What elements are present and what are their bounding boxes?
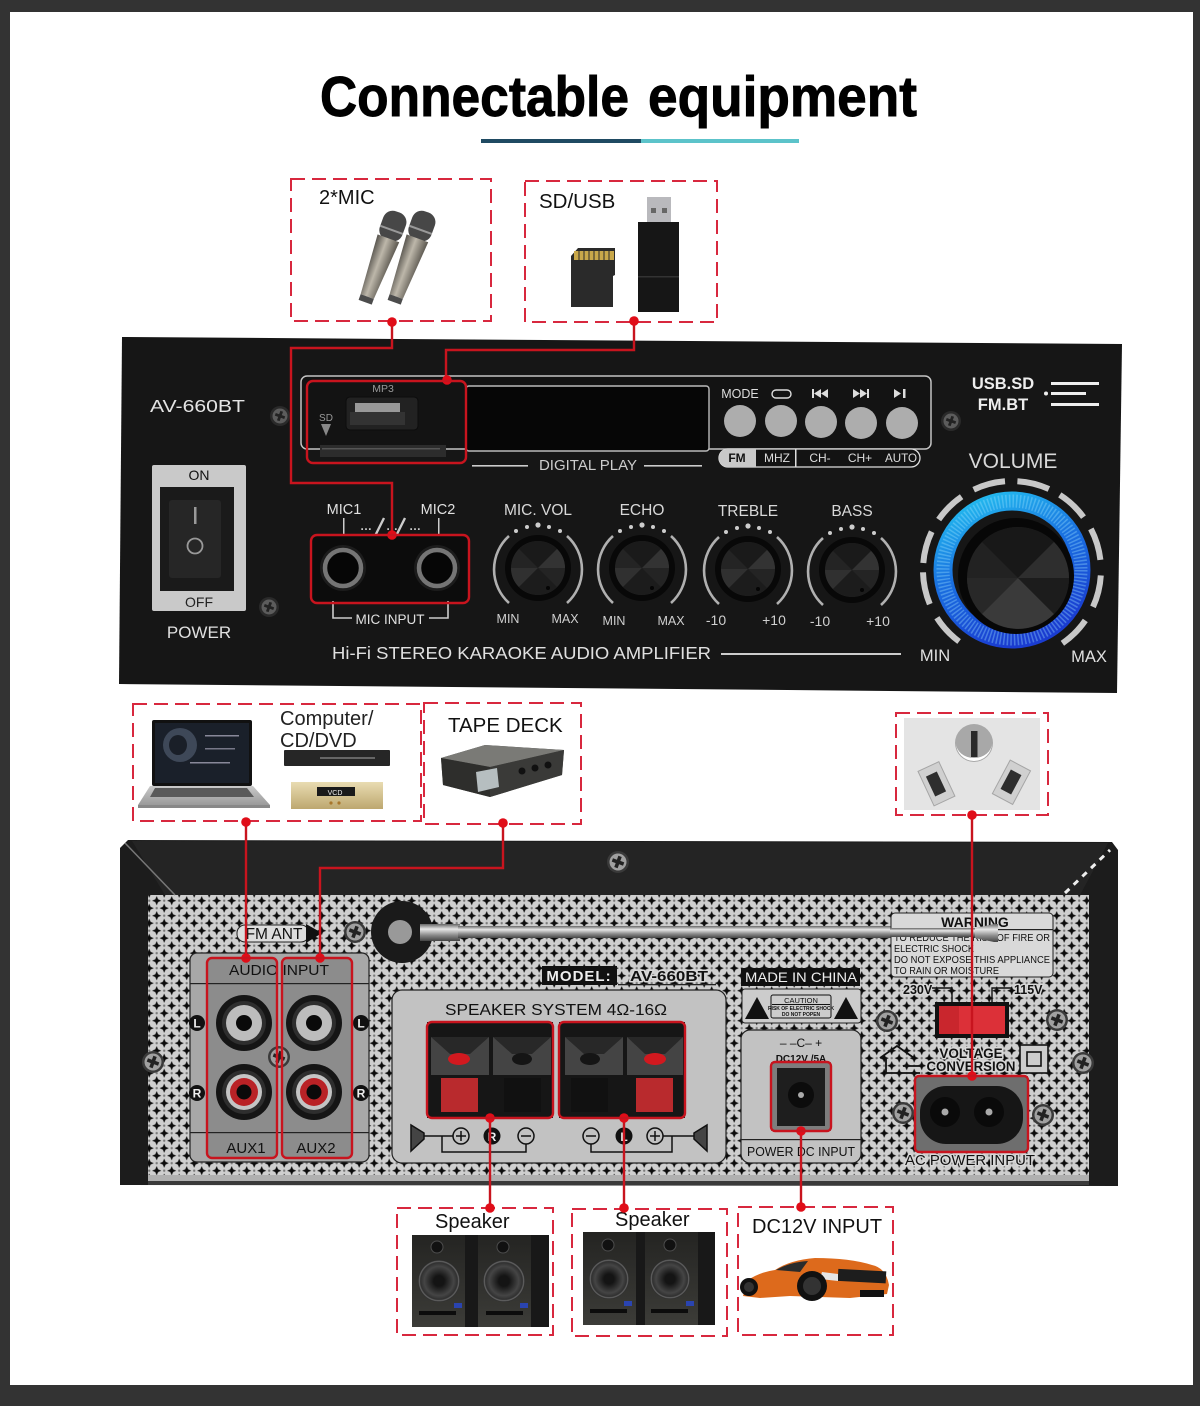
screws: front xyxy=(259,406,961,617)
knob: BASS xyxy=(808,503,896,629)
front panel of amplifier xyxy=(119,337,1122,693)
power switch: ON xyxy=(188,467,210,483)
voltage conversion label and icons: CONVERSION xyxy=(926,1059,1016,1074)
model plate: AV-660BT xyxy=(630,968,708,985)
USB and SD slots: SD xyxy=(319,413,333,424)
label: 2*MIC: 2*MIC xyxy=(319,187,375,209)
icon: speaker pair xyxy=(412,1235,549,1327)
terminal: L+ xyxy=(627,1037,683,1112)
made in china plate: MADE IN CHINA xyxy=(745,969,858,985)
caution plate xyxy=(742,989,861,1023)
LED display xyxy=(466,386,709,451)
connector: DC input line xyxy=(771,1062,831,1212)
label: Speaker: Speaker xyxy=(615,1209,690,1231)
icon: microphones xyxy=(354,208,438,306)
model label: AV-660BT xyxy=(150,396,245,416)
label: POWER: POWER xyxy=(167,623,231,642)
icon: orange sports car xyxy=(740,1258,889,1301)
warning plate: TO RAIN OR MOISTURE xyxy=(894,966,999,977)
icon: VCD player: VCD xyxy=(328,790,342,797)
display module frame xyxy=(301,376,931,449)
audio input block xyxy=(189,953,369,1162)
mode selector bar: CH+ xyxy=(848,451,872,465)
voltage conversion label and icons: VOLTAGE xyxy=(939,1046,1003,1061)
mic inputs: MIC2 xyxy=(421,502,455,518)
power switch: OFF xyxy=(185,594,213,610)
volume knob: MAX xyxy=(1071,648,1107,666)
voltage switch: 230V xyxy=(903,983,933,997)
USB.SD FM.BT badge: FM.BT xyxy=(978,396,1028,414)
label: TAPE DECK: TAPE DECK xyxy=(448,714,563,737)
knob: TREBLE: +10 xyxy=(762,612,786,628)
speaker system block: R xyxy=(488,1130,497,1144)
power switch xyxy=(152,465,246,611)
panel: Speaker (left channel) xyxy=(572,1209,727,1336)
mic inputs: … xyxy=(409,519,421,533)
panel: wall socket xyxy=(896,713,1048,815)
connector: computer line xyxy=(207,817,277,1158)
icon: speaker pair xyxy=(583,1232,715,1325)
AC power input xyxy=(905,1076,1035,1169)
label: Speaker: Speaker xyxy=(435,1211,510,1233)
mic inputs: … xyxy=(386,519,398,533)
AC power input: AC POWER INPUT xyxy=(905,1152,1035,1169)
terminal: L- xyxy=(565,1037,623,1112)
speaker system block: SPEAKER SYSTEM 4Ω-16Ω xyxy=(445,1002,667,1019)
title: Connectable xyxy=(320,65,629,129)
power DC input block: DC12V /5A xyxy=(776,1054,826,1065)
mic inputs: MIC1 xyxy=(327,502,361,518)
icon: socket xyxy=(904,718,1040,810)
knob: TREBLE xyxy=(704,503,792,628)
power DC input block: POWER DC INPUT xyxy=(747,1144,855,1159)
tagline: Hi-Fi STEREO KARAOKE AUDIO AMPLIFIER xyxy=(332,643,711,663)
mode selector bar: AUTO xyxy=(885,451,917,465)
caution plate: RISK OF ELECTRIC SHOCK xyxy=(768,1006,834,1012)
mode selector bar: CH- xyxy=(809,451,831,465)
antenna xyxy=(371,901,918,963)
icon: SD card xyxy=(571,248,615,307)
icon: DVD player xyxy=(284,750,390,766)
knob: BASS: BASS xyxy=(831,503,873,520)
audio input block: L xyxy=(193,1016,201,1030)
control buttons: MODE xyxy=(721,387,759,401)
power DC input block xyxy=(741,1030,861,1163)
label: FM ANT: FM ANT xyxy=(246,926,303,943)
knob: MIC.VOL xyxy=(494,502,582,626)
mic inputs: MIC INPUT xyxy=(356,612,424,627)
model plate: MODEL: xyxy=(546,968,612,985)
label: Computer/CD/DVD: CD/DVD xyxy=(280,730,357,752)
label: SD/USB: SD/USB xyxy=(539,190,615,213)
label: DC12V INPUT: DC12V INPUT xyxy=(752,1216,882,1238)
icon: laptop xyxy=(138,720,270,808)
knob: ECHO: MAX xyxy=(657,614,685,628)
USB and SD slots: MP3 xyxy=(372,383,394,395)
mic inputs: … xyxy=(360,519,372,533)
USB.SD FM.BT badge: USB.SD xyxy=(972,375,1034,393)
volume knob: VOLUME xyxy=(969,450,1057,473)
caution plate: CAUTION xyxy=(784,996,818,1005)
screws: rear xyxy=(142,851,1094,1126)
connector: tape deck line xyxy=(282,818,508,1158)
corner seam xyxy=(125,843,1110,895)
power DC input block: – –C– + xyxy=(780,1036,822,1050)
control buttons xyxy=(721,387,918,439)
title: equipment xyxy=(648,65,917,129)
knob: TREBLE: TREBLE xyxy=(718,503,778,520)
knob: MIC.VOL: MAX xyxy=(551,612,579,626)
knob: ECHO: ECHO xyxy=(620,502,664,519)
icon: USB stick xyxy=(638,197,679,312)
rear panel of amplifier xyxy=(120,840,1118,1186)
connector: speaker R line xyxy=(427,1022,553,1213)
mode selector bar: MHZ xyxy=(764,451,790,465)
USB and SD slots xyxy=(319,383,446,457)
panel: Speaker (right channel) xyxy=(397,1208,553,1335)
panel: DC12V INPUT xyxy=(738,1207,893,1335)
mic inputs xyxy=(311,502,469,627)
audio input block: AUX1 xyxy=(226,1140,266,1157)
connector: SD/USB line xyxy=(307,316,639,463)
warning plate: ELECTRIC SHOCK xyxy=(894,944,974,955)
knob: ECHO: MIN xyxy=(603,614,625,628)
label: DIGITAL PLAY: DIGITAL PLAY xyxy=(539,457,637,474)
voltage switch xyxy=(903,983,1043,1038)
USB.SD FM.BT badge xyxy=(972,375,1099,414)
knob: MIC.VOL: MIN xyxy=(497,612,519,626)
connector: speaker L line xyxy=(559,1022,685,1213)
volume knob: MIN xyxy=(920,647,950,665)
audio input block: R xyxy=(193,1086,202,1100)
audio input block: R xyxy=(357,1086,366,1100)
voltage switch: 115V xyxy=(1014,983,1043,997)
audio input block: AUX2 xyxy=(296,1140,336,1157)
volume knob xyxy=(920,450,1107,666)
connector: mic line xyxy=(291,317,469,603)
knob: TREBLE: -10 xyxy=(706,612,726,628)
audio input block: L xyxy=(357,1016,365,1030)
icon: tape deck recorder xyxy=(441,745,564,797)
title underline xyxy=(481,139,799,143)
panel: SD/USB xyxy=(525,181,717,322)
audio input block: AUDIO INPUT xyxy=(229,962,329,979)
perforated metal plate xyxy=(148,895,1089,1180)
mode selector bar: FM xyxy=(728,451,746,465)
label: Computer/CD/DVD: Computer/ xyxy=(280,708,374,730)
terminal: R+ xyxy=(431,1037,489,1112)
warning plate xyxy=(891,913,1053,977)
polarity marks xyxy=(411,1125,707,1152)
panel: Computer / CD / DVD xyxy=(133,704,421,821)
voltage conversion label and icons xyxy=(880,1045,1048,1074)
warning plate: DO NOT EXPOSE THIS APPLIANCE xyxy=(894,955,1050,966)
label: FM ANT xyxy=(237,924,322,943)
panel: TAPE DECK xyxy=(424,703,581,824)
icon: VCD player xyxy=(291,782,383,809)
speaker system block xyxy=(392,990,726,1163)
terminal: R- xyxy=(493,1037,551,1112)
warning plate: WARNING xyxy=(941,914,1009,930)
connector: socket line xyxy=(915,810,1028,1152)
mode selector bar xyxy=(719,449,920,467)
panel: 2*MIC xyxy=(291,179,491,321)
knob: BASS: -10 xyxy=(810,613,830,629)
warning plate: TO REDUCE THE RISK OF FIRE OR xyxy=(894,933,1050,944)
knob: ECHO xyxy=(598,502,686,628)
speaker system block: L xyxy=(620,1130,628,1144)
knob: MIC.VOL: MIC. VOL xyxy=(504,502,572,519)
model plate xyxy=(542,966,716,985)
knob: BASS: +10 xyxy=(866,613,890,629)
caution plate: DO NOT POPEN xyxy=(782,1012,821,1018)
antenna tip over warning xyxy=(890,924,998,942)
